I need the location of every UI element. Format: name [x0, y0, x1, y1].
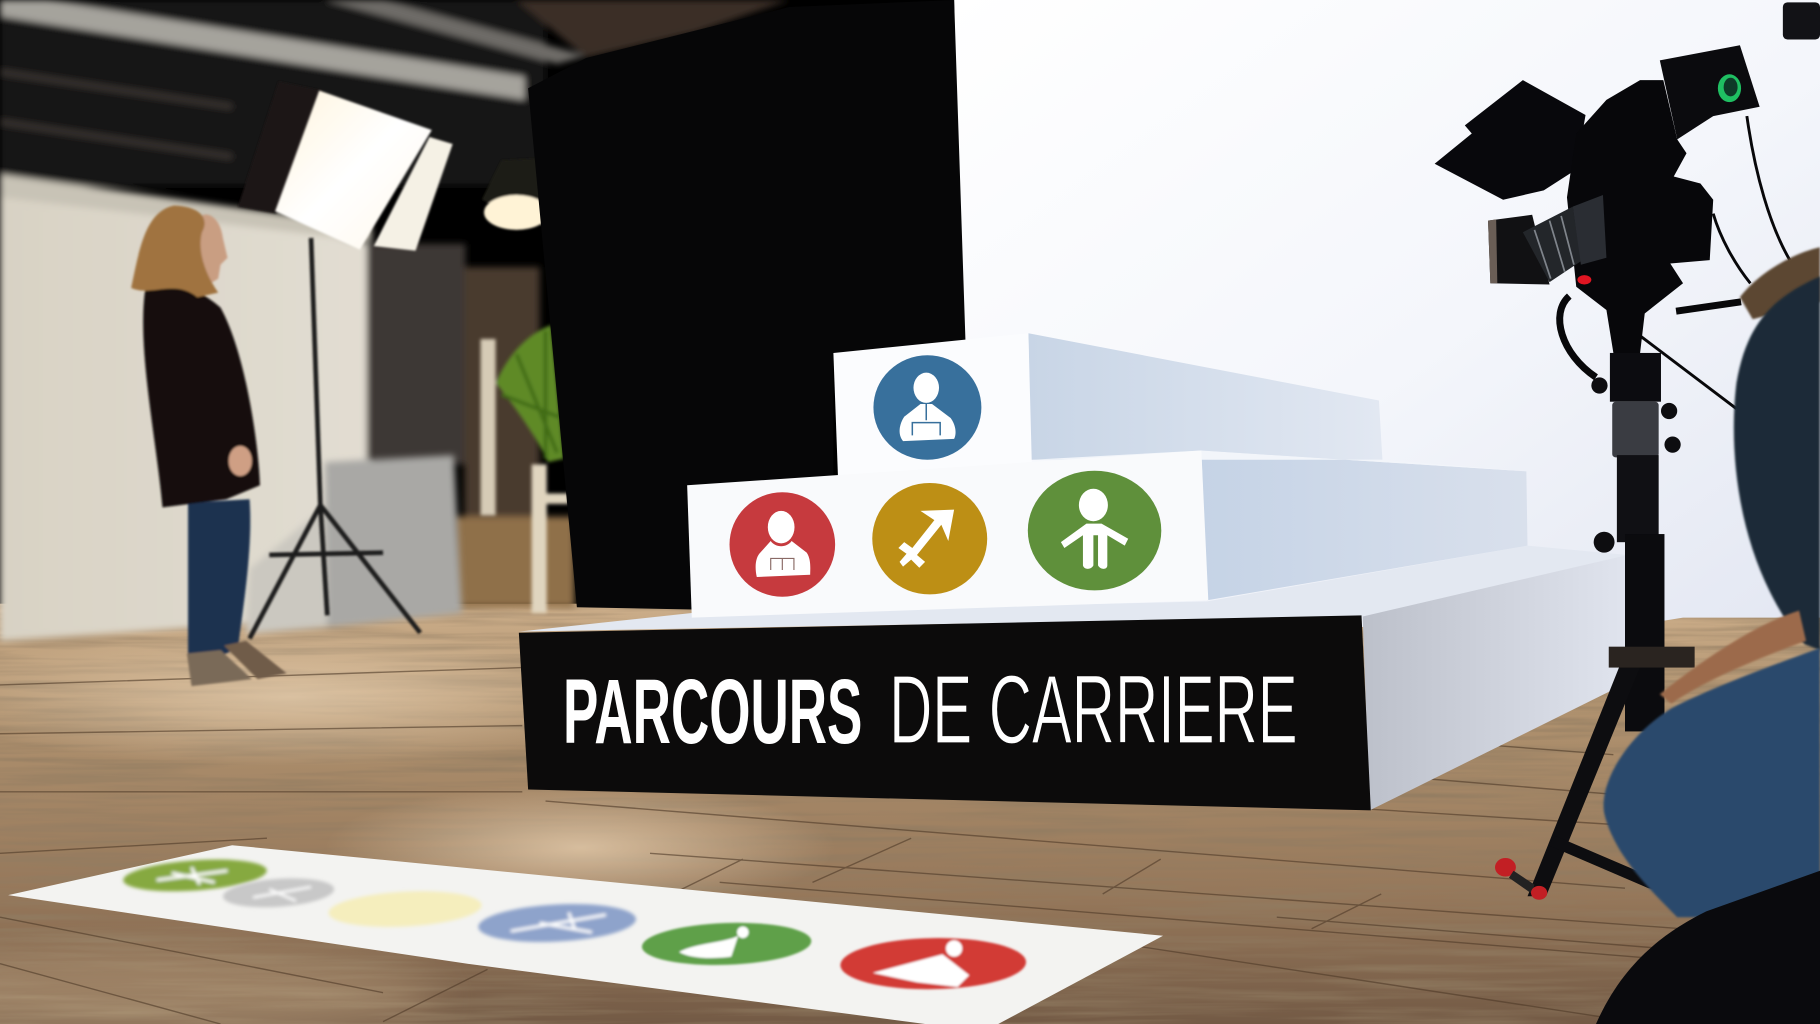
background table with grey cloth	[246, 455, 462, 634]
matte box hood	[1435, 80, 1586, 200]
podium step 2 side	[1201, 450, 1528, 600]
top right fixture	[1783, 2, 1820, 39]
icon: green person	[1028, 471, 1161, 590]
cables and handle	[1560, 116, 1790, 409]
podium step 1 side	[1028, 333, 1382, 460]
white studio backdrop	[954, 0, 1820, 627]
black curtain	[528, 0, 966, 610]
mat icon: pale yellow	[328, 888, 483, 930]
left wall and ceiling	[0, 0, 789, 641]
icon: red person	[730, 492, 835, 597]
podium base top	[519, 546, 1627, 632]
operator hair	[1740, 247, 1820, 319]
monitor with green indicator	[1660, 45, 1760, 139]
operator hand	[1660, 611, 1806, 704]
camera on tripod	[1435, 2, 1820, 900]
woman standing	[131, 205, 287, 686]
podium base side	[1363, 555, 1627, 810]
wooden floor	[0, 604, 1820, 1024]
title: parcours de carriere: PARCOURS	[563, 661, 862, 763]
lens	[1488, 195, 1606, 284]
podium step 2 top	[1032, 450, 1526, 471]
podium black front with title	[519, 615, 1371, 810]
icon: blue doctor	[873, 355, 981, 460]
softbox light on stand	[238, 81, 453, 639]
icon: yellow arrow	[872, 483, 987, 594]
red tally light	[1577, 275, 1591, 284]
camera body	[1567, 80, 1713, 353]
mat icon: grey	[222, 875, 335, 911]
mat icon: green person	[641, 920, 812, 968]
podium step 1 front panel	[833, 333, 1032, 478]
operator jeans	[1604, 648, 1820, 917]
title: parcours de carriere: DE CARRIERE	[889, 655, 1298, 764]
podium step 2 front panel	[687, 450, 1208, 618]
pendant lamp	[482, 158, 549, 230]
operator dark foreground	[1596, 871, 1820, 1024]
camera operator	[1596, 247, 1820, 1024]
mat icon: red person	[840, 936, 1027, 991]
floor mat with faded icons	[8, 845, 1163, 1024]
background plant and shelf	[481, 325, 569, 613]
mat icon: green	[122, 855, 268, 895]
operator sweater	[1734, 276, 1820, 650]
mat icon: blue	[477, 900, 637, 946]
tripod	[1495, 353, 1695, 900]
